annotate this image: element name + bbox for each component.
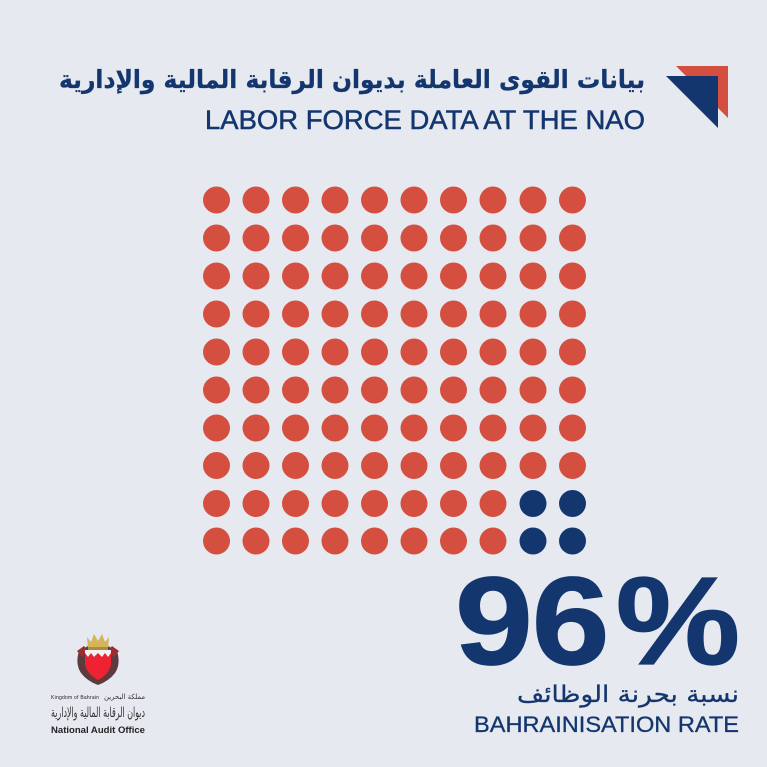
icon: Bahrain coat of arms (77, 634, 119, 685)
big stat: 96%: 9 (455, 552, 533, 691)
text: Arabic office name: ديوان الرقابة المالية والإدارية (51, 705, 145, 721)
text: Kingdom of Bahrain: Kingdom of Bahrain (51, 695, 99, 701)
big stat: 96%: 6 (532, 552, 610, 691)
label: English Bahrainisation rate: BAHRAINISATION RATE (474, 712, 739, 737)
label: Arabic Bahrainisation rate: نسبة بحرنة الوظائف (517, 682, 739, 708)
title: English heading: LABOR FORCE DATA AT THE NAO (205, 105, 645, 135)
chart: 100-dot waffle chart, 96 red and 4 blue (203, 186, 586, 554)
logo: National Audit Office (51, 634, 145, 736)
icon: header triangles (666, 66, 728, 128)
text: National Audit Office: National Audit Office (51, 725, 145, 736)
text: Arabic kingdom name: مملكة البحرين (104, 693, 145, 701)
big stat: 96%: % (616, 552, 740, 691)
title: Arabic heading: بيانات القوى العاملة بديوان الرقابة المالية والإدارية (59, 65, 645, 95)
